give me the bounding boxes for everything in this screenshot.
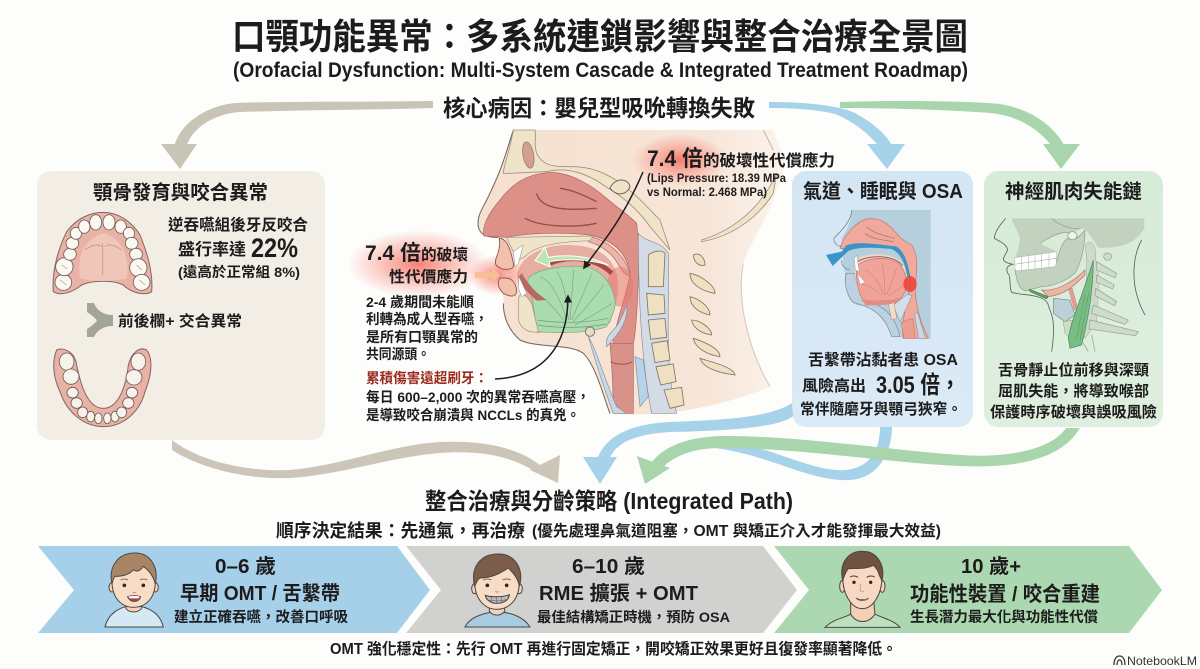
callout: 7.4x upper: 7.4 倍 bbox=[647, 146, 703, 171]
callout: red glow left bbox=[348, 230, 488, 298]
icon: lower dental arch bbox=[54, 349, 151, 427]
footer note: OMT 強化穩定性：先行 OMT 再進行固定矯正，開咬矯正效果更好且復發率顯著降低。 bbox=[330, 639, 897, 658]
callout: 7.4x upper: (Lips Pressure: 18.39 MPa bbox=[647, 171, 786, 185]
callout: 7.4x left: 7.4 倍 bbox=[365, 241, 421, 265]
text: stage 6-10: 6–10 歲 bbox=[572, 555, 645, 578]
tongue bbox=[528, 266, 615, 333]
text: stage 6-10 bbox=[537, 555, 730, 625]
callout: 7.4x left: 的破壞 bbox=[421, 245, 468, 264]
text block: origin bbox=[366, 294, 488, 362]
text: stage 0-6: 建立正確吞嚥，改善口呼吸 bbox=[174, 608, 348, 626]
subtitle: (Orofacial Dysfunction: Multi-System Cascade & Integrated Treatment Roadmap) bbox=[233, 59, 968, 82]
text block: origin: 利轉為成人型吞嚥， bbox=[366, 311, 488, 327]
heading: neuromuscular panel: 神經肌肉失能鏈 bbox=[1005, 180, 1142, 203]
icon: child with braces bbox=[465, 554, 530, 627]
icon: upper dental arch bbox=[53, 212, 152, 294]
text: prevalence: (遠高於正常組 8%) bbox=[178, 264, 300, 280]
arrow: core to neuromuscular panel bbox=[840, 101, 1080, 169]
title: 口顎功能異常：多系統連鎖影響與整合治療全景圖 bbox=[232, 16, 968, 57]
text: prevalence: 盛行率達 bbox=[178, 239, 247, 259]
text block: origin: 2-4 歲期間未能順 bbox=[366, 294, 474, 310]
arrow: to upper tongue bbox=[584, 172, 643, 268]
callout: red glow upper bbox=[632, 134, 728, 186]
callout: 7.4x upper: vs Normal: 2.468 MPa) bbox=[647, 185, 767, 199]
panel: neuromuscular chain bbox=[984, 171, 1163, 427]
heading: jaw panel: 顎骨發育與咬合異常 bbox=[93, 181, 268, 204]
text: prevalence: 22% bbox=[251, 233, 298, 263]
arrow: to tongue body bbox=[495, 296, 568, 379]
text: stage 10+: 功能性裝置 / 咬合重建 bbox=[910, 582, 1100, 606]
text: OSA risk bbox=[800, 350, 962, 418]
spine bbox=[638, 233, 735, 413]
arrow: core to jaw panel bbox=[161, 101, 433, 169]
callout: 7.4x upper bbox=[647, 146, 835, 199]
callout: 7.4x left bbox=[365, 241, 468, 286]
icon: pressure arrow at lips bbox=[475, 267, 500, 283]
illustration: skull and neck muscles bbox=[994, 218, 1145, 352]
text: stage 10+: 生長潛力最大化與功能性代償 bbox=[910, 609, 1098, 626]
label: malocclusion: 前後欄+ 交合異常 bbox=[118, 312, 242, 330]
text block: cumulative damage: 累積傷害遠超刷牙： bbox=[366, 370, 488, 386]
text: prevalence bbox=[168, 215, 308, 280]
text: stage 0-6 bbox=[174, 555, 348, 626]
arrow: core to airway panel bbox=[769, 102, 905, 169]
text: hyoid chain: 保護時序破壞與誤吸風險 bbox=[990, 403, 1157, 421]
logo: NotebookLM: NotebookLM bbox=[1127, 654, 1197, 668]
icon: teen face bbox=[825, 551, 900, 627]
panel: jaw development bbox=[37, 171, 325, 440]
illustration: head sagittal anatomy bbox=[468, 130, 785, 414]
callout: 7.4x left: 性代價應力 bbox=[389, 267, 468, 286]
text block: origin: 共同源頭。 bbox=[366, 346, 430, 362]
text: stage 6-10: RME 擴張 + OMT bbox=[539, 582, 698, 605]
text: stage 0-6: 0–6 歲 bbox=[215, 555, 276, 578]
arrow: airway panel loop bbox=[715, 427, 892, 480]
heading: integrated path: 整合治療與分齡策略 (Integrated Path) bbox=[425, 488, 793, 514]
text: stage 0-6: 早期 OMT / 舌繫帶 bbox=[180, 582, 340, 605]
text block: cumulative damage bbox=[366, 370, 590, 423]
text: stage 6-10: 最佳結構矯正時機，預防 OSA bbox=[537, 609, 730, 625]
arrow: neuromuscular panel to integrated path bbox=[637, 428, 1080, 484]
text: OSA risk: 常伴隨磨牙與顎弓狹窄。 bbox=[800, 400, 962, 418]
timeline stage: 10+ bbox=[774, 546, 1162, 633]
panel: airway sleep OSA bbox=[792, 171, 973, 427]
text block: cumulative damage: 是導致咬合崩潰與 NCCLs 的真兇。 bbox=[366, 407, 580, 423]
illustration: airway cross-section bbox=[826, 210, 931, 338]
subheading: sequence: 順序決定結果：先通氣，再治療 bbox=[276, 520, 525, 541]
text: stage 10+: 10 歲+ bbox=[961, 555, 1021, 578]
text: hyoid chain: 舌骨靜止位前移與深頸 bbox=[998, 361, 1149, 379]
text: OSA risk: 風險高出 bbox=[802, 376, 866, 395]
heading: core cause: 核心病因：嬰兒型吸吮轉換失敗 bbox=[443, 95, 755, 121]
text: OSA risk: 3.05 倍， bbox=[876, 371, 960, 399]
subheading: sequence: (優先處理鼻氣道阻塞，OMT 與矯正介入才能發揮最大效益) bbox=[532, 521, 941, 540]
icon: tongue movement arrow bbox=[535, 247, 608, 267]
subheading: sequence bbox=[276, 520, 941, 541]
heading: airway panel: 氣道、睡眠與 OSA bbox=[803, 180, 963, 203]
text: hyoid chain: 屈肌失能，將導致喉部 bbox=[998, 382, 1149, 400]
arrow: jaw panel to integrated path bbox=[172, 440, 560, 483]
text: OSA risk: 舌繫帶沾黏者患 OSA bbox=[808, 350, 958, 369]
timeline stage: 6-10 bbox=[406, 546, 797, 633]
arrow: airway panel to integrated path bbox=[583, 403, 793, 484]
text: prevalence: 逆吞嚥組後牙反咬合 bbox=[168, 215, 308, 234]
text: stage 10+ bbox=[910, 555, 1100, 626]
icon: young child bbox=[105, 553, 163, 627]
callout: 7.4x upper: 的破壞性代償應力 bbox=[703, 151, 835, 170]
text: hyoid chain bbox=[990, 361, 1157, 421]
icon: merge fork bbox=[87, 303, 113, 337]
text block: cumulative damage: 每日 600–2,000 次的異常吞嚥高壓， bbox=[366, 389, 590, 405]
timeline stage: 0-6 bbox=[38, 546, 430, 633]
text block: origin: 是所有口顎異常的 bbox=[366, 329, 478, 345]
